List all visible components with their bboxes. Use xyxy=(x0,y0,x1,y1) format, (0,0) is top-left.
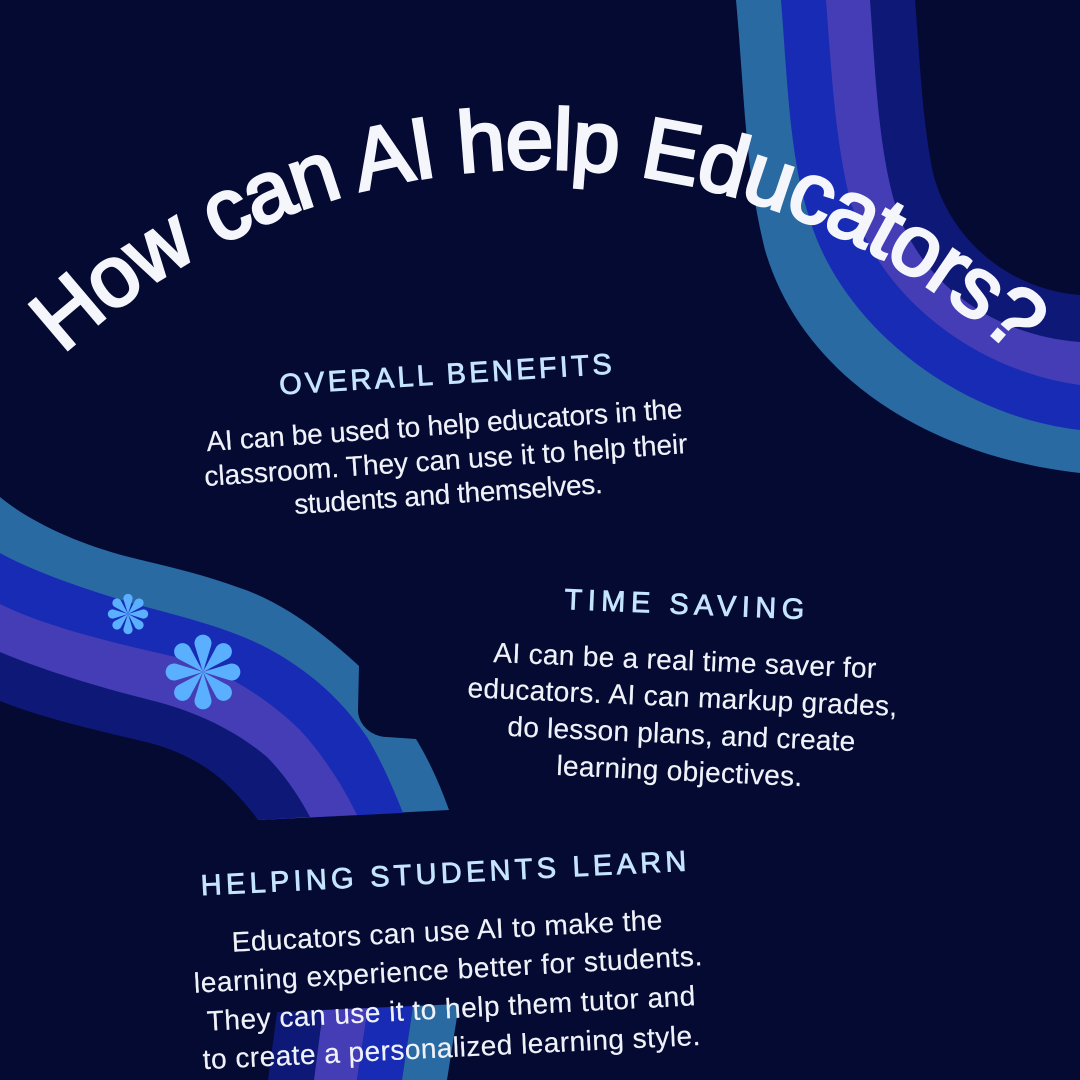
decorative band: bottom xyxy=(268,1004,459,1080)
heading: helping students learn: HELPING STUDENTS LEARN xyxy=(200,846,687,902)
text block: time saving: educators. AI can markup grades, xyxy=(467,672,898,722)
text block: helping students learn: learning experience better for students. xyxy=(193,940,703,999)
text block: helping students learn xyxy=(193,904,703,1075)
text block: time saving: learning objectives. xyxy=(556,750,803,792)
text block: helping students learn: They can use it to help them tutor and xyxy=(206,980,696,1037)
decorative band: top right xyxy=(736,0,1080,473)
text block: overall benefits: classroom. They can use it to help their xyxy=(203,428,688,492)
text block: helping students learn: to create a personalized learning style. xyxy=(202,1020,701,1075)
icon: large flower xyxy=(166,635,240,709)
text block: overall benefits xyxy=(203,393,688,520)
decorative band: middle left xyxy=(0,497,449,820)
heading: time saving: TIME SAVING xyxy=(564,584,805,626)
text block: overall benefits: AI can be used to help educators in the xyxy=(205,393,683,457)
icon: small flower xyxy=(108,594,148,634)
section: time saving xyxy=(467,584,898,792)
text block: time saving xyxy=(467,637,898,792)
text block: overall benefits: students and themselves. xyxy=(293,468,604,520)
heading: overall benefits: OVERALL BENEFITS xyxy=(278,349,613,401)
section: helping students learn xyxy=(193,846,703,1075)
text block: time saving: AI can be a real time saver for xyxy=(493,637,877,684)
section: overall benefits xyxy=(203,349,688,520)
text block: time saving: do lesson plans, and create xyxy=(507,711,856,757)
title: How can AI help Educators? xyxy=(28,105,1046,352)
text block: helping students learn: Educators can use AI to make the xyxy=(231,904,663,958)
